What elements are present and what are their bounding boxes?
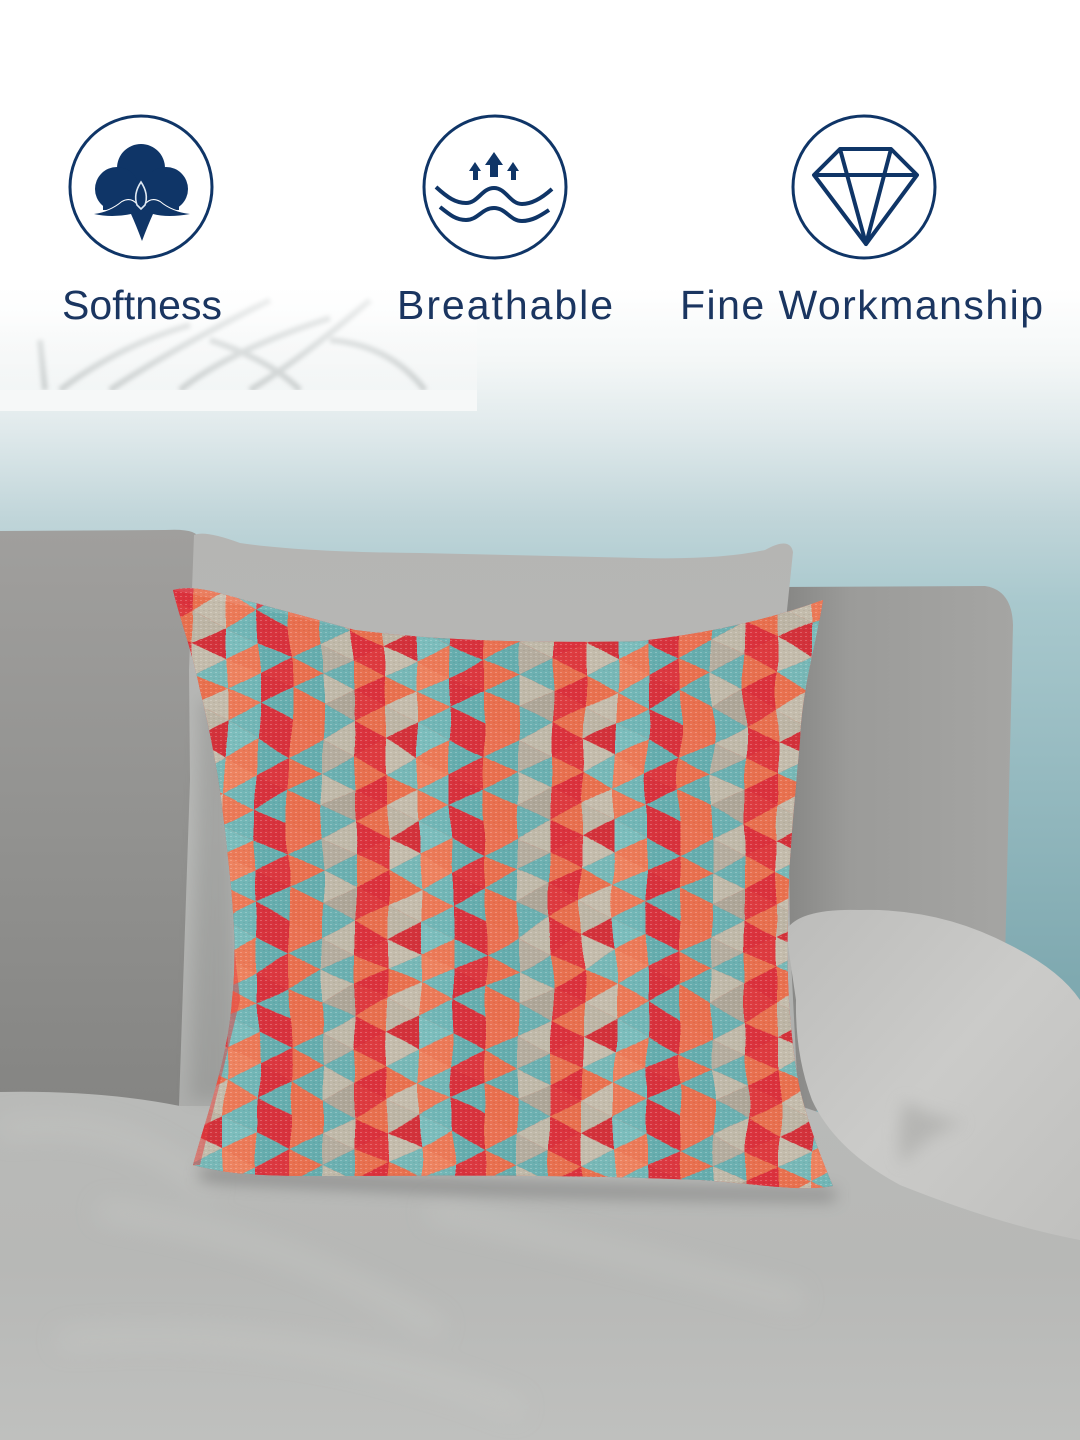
label: Fine Workmanship: Fine Workmanship (680, 282, 1043, 328)
feature: Breathable (397, 116, 613, 328)
label: Softness: Softness (62, 282, 222, 328)
bolster crease (899, 1100, 965, 1165)
sofa right back cushion (780, 586, 1013, 1140)
sofa left back cushion (0, 530, 198, 1120)
feature: Softness (62, 116, 222, 328)
icon: diamond (793, 116, 935, 258)
icon: breathable waves and arrows (424, 116, 566, 258)
feature: Fine Workmanship (680, 116, 1043, 328)
icon: cotton boll (70, 116, 212, 258)
sofa back pillow (178, 534, 800, 1135)
patterned pillow (173, 588, 833, 1188)
wall picture frame (0, 270, 477, 411)
label: Breathable: Breathable (397, 282, 613, 328)
sofa seat (0, 1092, 1080, 1440)
sofa (0, 530, 1080, 1440)
sofa bolster cushion (786, 910, 1080, 1240)
pillow cast shadow (200, 1168, 835, 1200)
